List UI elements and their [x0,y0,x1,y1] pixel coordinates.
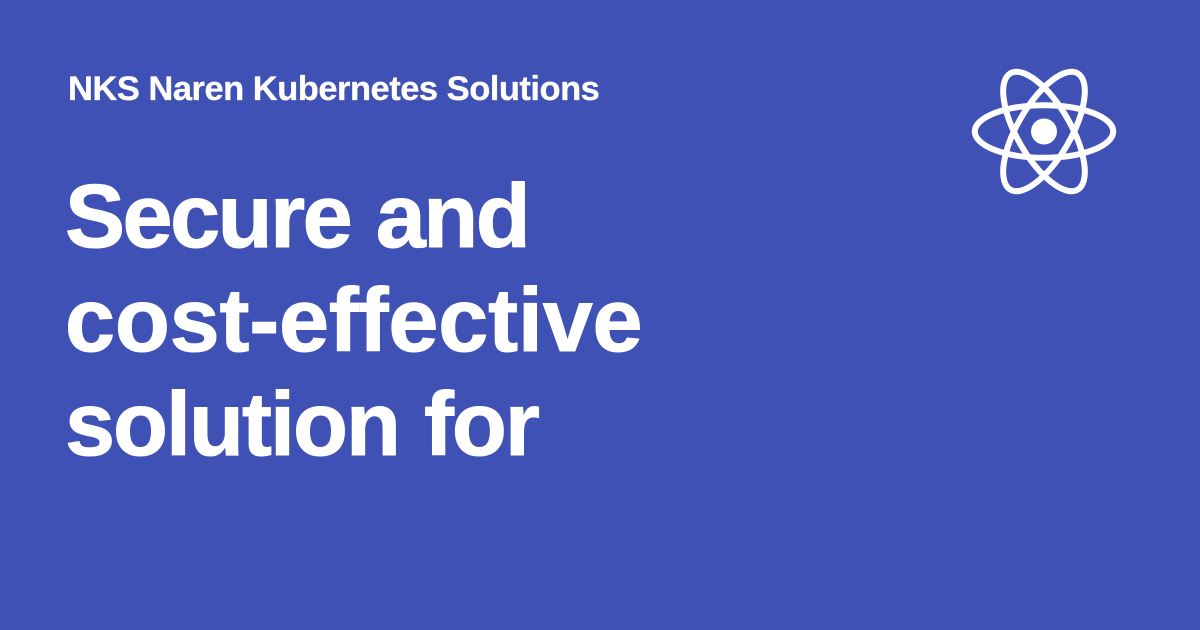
title [65,166,642,474]
title: solution for [65,374,538,474]
title: Secure and [65,166,528,266]
subtitle: site name: NKS Naren Kubernetes Solutions [68,70,599,108]
title: cost-effective [65,270,642,370]
icon: atom logo [972,68,1116,194]
